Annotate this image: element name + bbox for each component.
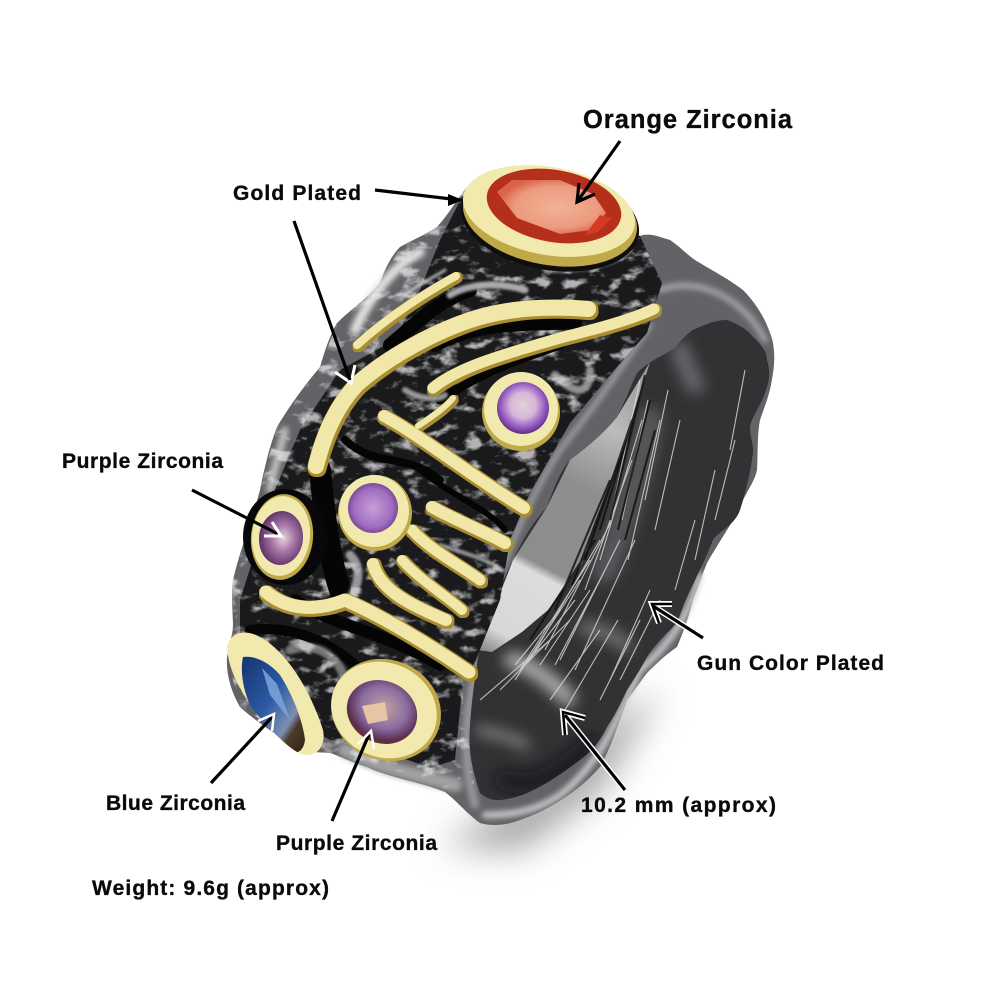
- label: Weight: Weight: 9.6g (approx): [92, 877, 329, 900]
- arrow: Purple Zirconia bottom: [332, 731, 374, 821]
- inner band soft light bands: [480, 350, 695, 783]
- inner band brushed lines: [480, 370, 745, 710]
- label: Gun Color Plated: Gun Color Plated: [697, 652, 884, 675]
- soft drop shadow: [440, 690, 660, 850]
- label: Purple Zirconia left: Purple Zirconia: [62, 450, 223, 473]
- label: Orange Zirconia: Orange Zirconia: [583, 106, 793, 134]
- orange zirconia stone: [453, 153, 647, 285]
- ring band: [225, 153, 780, 825]
- rim highlights: [270, 252, 765, 815]
- blue zirconia stone: [227, 632, 324, 755]
- face surface speckle: [225, 185, 665, 795]
- purple zirconia stone left: [243, 489, 327, 585]
- arrow: Gold Plated to bezel: [375, 190, 463, 206]
- arrow: 10.2 mm: [563, 712, 625, 790]
- face contour grooves: [250, 250, 630, 680]
- ring metal silhouette: [227, 187, 774, 825]
- label: Gold Plated: Gold Plated: [233, 182, 361, 205]
- inner band lit patch: [478, 362, 650, 652]
- arrow: Purple Zirconia left: [192, 490, 281, 536]
- arrow: Gold Plated to streak: [294, 221, 355, 383]
- inner band surface: [460, 310, 780, 810]
- purple zirconia stone upper right: [482, 372, 560, 451]
- label: Blue Zirconia: Blue Zirconia: [106, 792, 245, 815]
- plum zirconia stone: [314, 641, 458, 779]
- textured face base: [240, 187, 662, 768]
- infographic: ring with annotated features: [63, 108, 883, 900]
- arrow: Blue Zirconia: [211, 714, 274, 783]
- arrow: Gun Color Plated: [652, 604, 703, 638]
- label: Purple Zirconia bottom: Purple Zirconia: [276, 832, 437, 855]
- purple zirconia stone centre: [338, 475, 412, 551]
- label: 10.2 mm: 10.2 mm (approx): [581, 794, 776, 817]
- arrow: Orange Zirconia: [577, 141, 620, 202]
- gold inlay streaks: [266, 276, 654, 672]
